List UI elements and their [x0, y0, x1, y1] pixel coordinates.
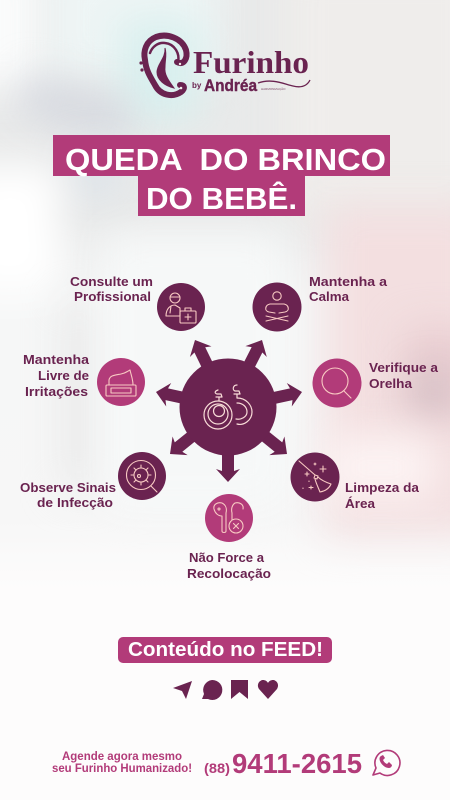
icon: virus under magnifier	[118, 452, 166, 500]
title background	[53, 135, 390, 216]
phone number: (88)	[204, 761, 230, 776]
label: Consulte um	[70, 274, 153, 289]
logo swash	[258, 80, 310, 87]
hub disc	[180, 358, 276, 456]
node: verifique a orelha	[312, 358, 439, 408]
icon: magnifier	[312, 358, 362, 408]
icon: doctor with medical case	[157, 283, 205, 331]
logo wordmark: Furinho	[193, 44, 309, 80]
node: observe sinais de infecção: de Infecção	[37, 495, 113, 510]
node: mantenha livre de irritações: Livre de	[38, 368, 89, 383]
social icons	[173, 680, 278, 700]
booking text: Agende agora mesmo	[62, 751, 182, 763]
icon: earbuds with cross	[205, 494, 253, 542]
icon: heart	[258, 680, 278, 699]
node: não force a recolocação: Recolocação	[187, 566, 271, 581]
booking text	[52, 751, 192, 775]
label: Limpeza da	[345, 480, 420, 495]
icon: send	[173, 681, 192, 699]
booking text: seu Furinho Humanizado!	[52, 763, 192, 775]
label: Não Force a	[189, 550, 265, 565]
label: Observe Sinais	[20, 480, 116, 495]
node: observe sinais de infecção	[20, 452, 166, 510]
icon: bookmark	[231, 680, 248, 699]
logo small print: HARMONIZAÇÃO	[261, 86, 286, 91]
node: consulte um profissional: Profissional	[74, 289, 151, 304]
node: mantenha a calma: Calma	[309, 289, 350, 304]
arrows	[154, 335, 304, 482]
label: Mantenha	[23, 352, 90, 367]
label: Verifique a	[369, 360, 439, 375]
label: Mantenha a	[309, 274, 388, 289]
logo: Furinho by Andréa	[139, 36, 310, 95]
icon: meditating person	[252, 282, 302, 332]
icon: ear	[139, 36, 187, 95]
icon: whatsapp	[373, 750, 400, 775]
logo byline: by	[192, 81, 202, 90]
node: não force a recolocação	[187, 494, 271, 581]
node: limpeza da área	[290, 452, 420, 511]
icon: cream jar	[97, 358, 145, 406]
title	[53, 135, 390, 216]
icon: broom with sparkles	[290, 452, 340, 502]
icon: comment	[202, 680, 222, 700]
phone number: 9411-2615	[232, 748, 362, 779]
title line 2: DO BEBÊ.	[146, 180, 297, 216]
logo name: Andréa	[204, 76, 257, 95]
icon: earrings	[204, 385, 252, 429]
node: mantenha livre de irritações	[23, 352, 145, 406]
title line 1: QUEDA DO BRINCO	[65, 142, 386, 177]
node: mantenha a calma	[252, 274, 388, 332]
node: consulte um profissional	[70, 274, 205, 331]
node: limpeza da área: Área	[345, 496, 376, 511]
node: mantenha livre de irritações: Irritações	[25, 384, 88, 399]
call to action pill: Conteúdo no FEED!	[128, 638, 323, 661]
node: verifique a orelha: Orelha	[369, 376, 413, 391]
central hub with arrows	[154, 335, 304, 482]
